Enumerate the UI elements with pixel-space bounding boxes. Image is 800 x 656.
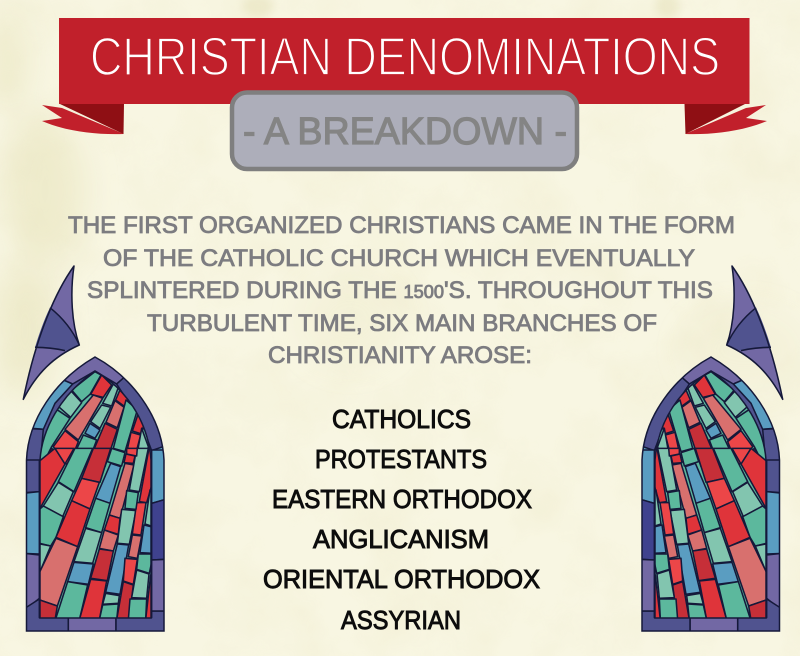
left stained glass window	[23, 266, 167, 633]
list of six branches: PROTESTANTS	[315, 444, 487, 474]
intro paragraph: OF THE CATHOLIC CHURCH WHICH EVENTUALLY	[103, 245, 695, 272]
left ribbon tail	[42, 104, 124, 134]
list of six branches	[263, 404, 540, 635]
window spire	[23, 266, 79, 399]
subtitle plate	[232, 92, 577, 169]
list of six branches: ASSYRIAN	[341, 605, 461, 635]
ribbon body	[59, 18, 750, 104]
intro paragraph: SPLINTERED DURING THE 1500'S. THROUGHOUT THIS	[87, 277, 713, 304]
intro paragraph	[68, 212, 735, 369]
right stained glass window	[639, 266, 783, 633]
list of six branches: ANGLICANISM	[313, 524, 489, 554]
ribbon banner	[42, 18, 767, 134]
window frame	[23, 353, 167, 633]
intro paragraph: THE FIRST ORGANIZED CHRISTIANS CAME IN THE FORM	[68, 212, 735, 239]
list of six branches: CATHOLICS	[332, 404, 471, 434]
list of six branches: ORIENTAL ORTHODOX	[263, 564, 540, 594]
subtitle: - A BREAKDOWN -	[243, 111, 567, 153]
list of six branches: EASTERN ORTHODOX	[272, 484, 532, 514]
window glass panes	[33, 370, 153, 620]
intro paragraph: CHRISTIANITY AROSE:	[268, 342, 532, 369]
right ribbon tail	[684, 104, 767, 134]
window leading outlines	[26, 357, 164, 631]
intro paragraph: TURBULENT TIME, SIX MAIN BRANCHES OF	[147, 310, 657, 337]
